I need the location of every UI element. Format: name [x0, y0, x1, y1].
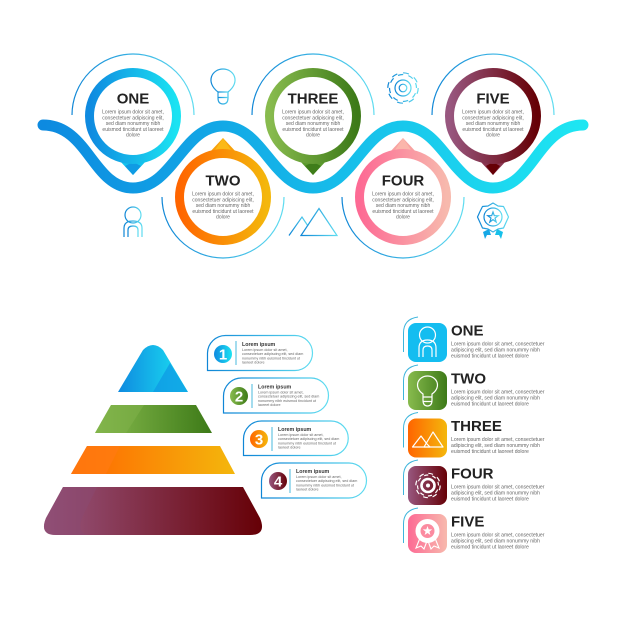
list item five: Lorem ipsum dolor sit amet, consectetuer [451, 532, 545, 538]
card 3: Lorem ipsum [278, 427, 312, 433]
card 1: 1 [219, 346, 227, 364]
list item three: adipiscing elit, sed diam nonummy nibh [451, 443, 540, 449]
icon: light bulb [211, 69, 235, 104]
step two: TWO [206, 172, 241, 190]
tier 1 [118, 345, 188, 392]
card 2: consectetuer adipiscing elit, sed diam [258, 395, 319, 399]
card 3: 3 [255, 432, 263, 448]
card 4: laoreet dolore [296, 488, 319, 492]
step two [162, 138, 284, 258]
step three [252, 54, 374, 175]
list item four: adipiscing elit, sed diam nonummy nibh [451, 490, 540, 496]
list item three: Lorem ipsum dolor sit amet, consectetuer [451, 437, 545, 443]
step five: FIVE [476, 90, 510, 108]
step three: dolore [306, 133, 320, 139]
list item four [404, 460, 545, 505]
card 4: nonummy nibh euismod tincidunt ut [296, 483, 354, 487]
card 4: Lorem ipsum dolor sit amet, [296, 475, 342, 479]
step five: sed diam nonummy nibh [466, 121, 520, 127]
step one: sed diam nonummy nibh [106, 121, 160, 127]
step four: consectetuer adipiscing elit, [372, 197, 434, 203]
list item two: Lorem ipsum dolor sit amet, consectetuer [451, 390, 545, 396]
list item two: euismod tincidunt ut laoreet dolore [451, 402, 529, 408]
step five: consectetuer adipiscing elit, [462, 115, 524, 121]
step five: dolore [486, 133, 500, 139]
list item two: adipiscing elit, sed diam nonummy nibh [451, 396, 540, 402]
step three: sed diam nonummy nibh [286, 121, 340, 127]
card 2: 2 [235, 388, 243, 406]
card 1 [208, 336, 312, 370]
wavy ribbon [43, 125, 583, 188]
list item one: ONE [451, 322, 484, 340]
step two: Lorem ipsum dolor sit amet, [192, 192, 254, 198]
card 3: nonummy nibh euismod tincidunt ut [278, 441, 336, 445]
card 2: Lorem ipsum dolor sit amet, [258, 390, 304, 394]
icon: person [124, 207, 142, 237]
step five: Lorem ipsum dolor sit amet, [462, 110, 524, 116]
list item three: THREE [451, 418, 502, 435]
step one: consectetuer adipiscing elit, [102, 115, 164, 121]
step two: sed diam nonummy nibh [196, 203, 250, 209]
step one: Lorem ipsum dolor sit amet, [102, 110, 164, 116]
list item five: adipiscing elit, sed diam nonummy nibh [451, 538, 540, 544]
card 4 [262, 463, 366, 498]
card 3: consectetuer adipiscing elit, sed diam [278, 437, 339, 441]
card 2: Lorem ipsum [258, 384, 292, 390]
card 4: Lorem ipsum [296, 469, 330, 475]
list item two [404, 365, 545, 410]
icon: award badge [478, 203, 508, 239]
card 4: consectetuer adipiscing elit, sed diam [296, 479, 357, 483]
card 3: Lorem ipsum dolor sit amet, [278, 433, 324, 437]
step four: dolore [396, 215, 410, 221]
tier 2 [95, 405, 212, 433]
card 2: nonummy nibh euismod tincidunt ut [258, 399, 316, 403]
step three: euismod tincidunt ut laoreet [282, 127, 344, 133]
step three: THREE [288, 90, 338, 108]
list item five [404, 508, 545, 553]
list item three: euismod tincidunt ut laoreet dolore [451, 449, 529, 455]
card 4: 4 [274, 474, 283, 490]
card 1: Lorem ipsum [242, 342, 276, 348]
step four: Lorem ipsum dolor sit amet, [372, 192, 434, 198]
step three: consectetuer adipiscing elit, [282, 115, 344, 121]
list item five: FIVE [451, 514, 484, 530]
icon: mountains [289, 208, 337, 236]
step two: consectetuer adipiscing elit, [192, 197, 254, 203]
step three: Lorem ipsum dolor sit amet, [282, 110, 344, 116]
card 1: nonummy nibh euismod tincidunt ut [242, 356, 300, 360]
tier 4 [44, 487, 262, 535]
card 3 [244, 421, 348, 456]
step four: sed diam nonummy nibh [376, 203, 430, 209]
step five [432, 54, 554, 175]
list item four: FOUR [451, 466, 494, 482]
list item four: Lorem ipsum dolor sit amet, consectetuer [451, 484, 545, 490]
card 2: laoreet dolore [258, 403, 281, 407]
list item two: TWO [451, 370, 486, 388]
list item one: euismod tincidunt ut laoreet dolore [451, 354, 529, 360]
step one: ONE [117, 90, 149, 108]
step two: dolore [216, 215, 230, 221]
list item one: adipiscing elit, sed diam nonummy nibh [451, 348, 540, 354]
card 1: laoreet dolore [242, 361, 265, 365]
list item one [404, 317, 545, 362]
list item five: euismod tincidunt ut laoreet dolore [451, 544, 529, 550]
step two: euismod tincidunt ut laoreet [192, 209, 254, 215]
card 1: Lorem ipsum dolor sit amet, [242, 348, 288, 352]
card 3: laoreet dolore [278, 446, 301, 450]
list item four: euismod tincidunt ut laoreet dolore [451, 496, 529, 502]
tier 3 [71, 446, 235, 474]
icon: gear [388, 73, 418, 103]
step one [72, 54, 194, 175]
step one: euismod tincidunt ut laoreet [102, 127, 164, 133]
step four: euismod tincidunt ut laoreet [372, 209, 434, 215]
pyramid [44, 345, 262, 535]
card 1: consectetuer adipiscing elit, sed diam [242, 352, 303, 356]
step four [342, 138, 464, 258]
step four: FOUR [382, 172, 424, 190]
list item one: Lorem ipsum dolor sit amet, consectetuer [451, 342, 545, 348]
list item three [404, 412, 545, 458]
step one: dolore [126, 133, 140, 139]
card 2 [224, 378, 328, 413]
step five: euismod tincidunt ut laoreet [462, 127, 524, 133]
